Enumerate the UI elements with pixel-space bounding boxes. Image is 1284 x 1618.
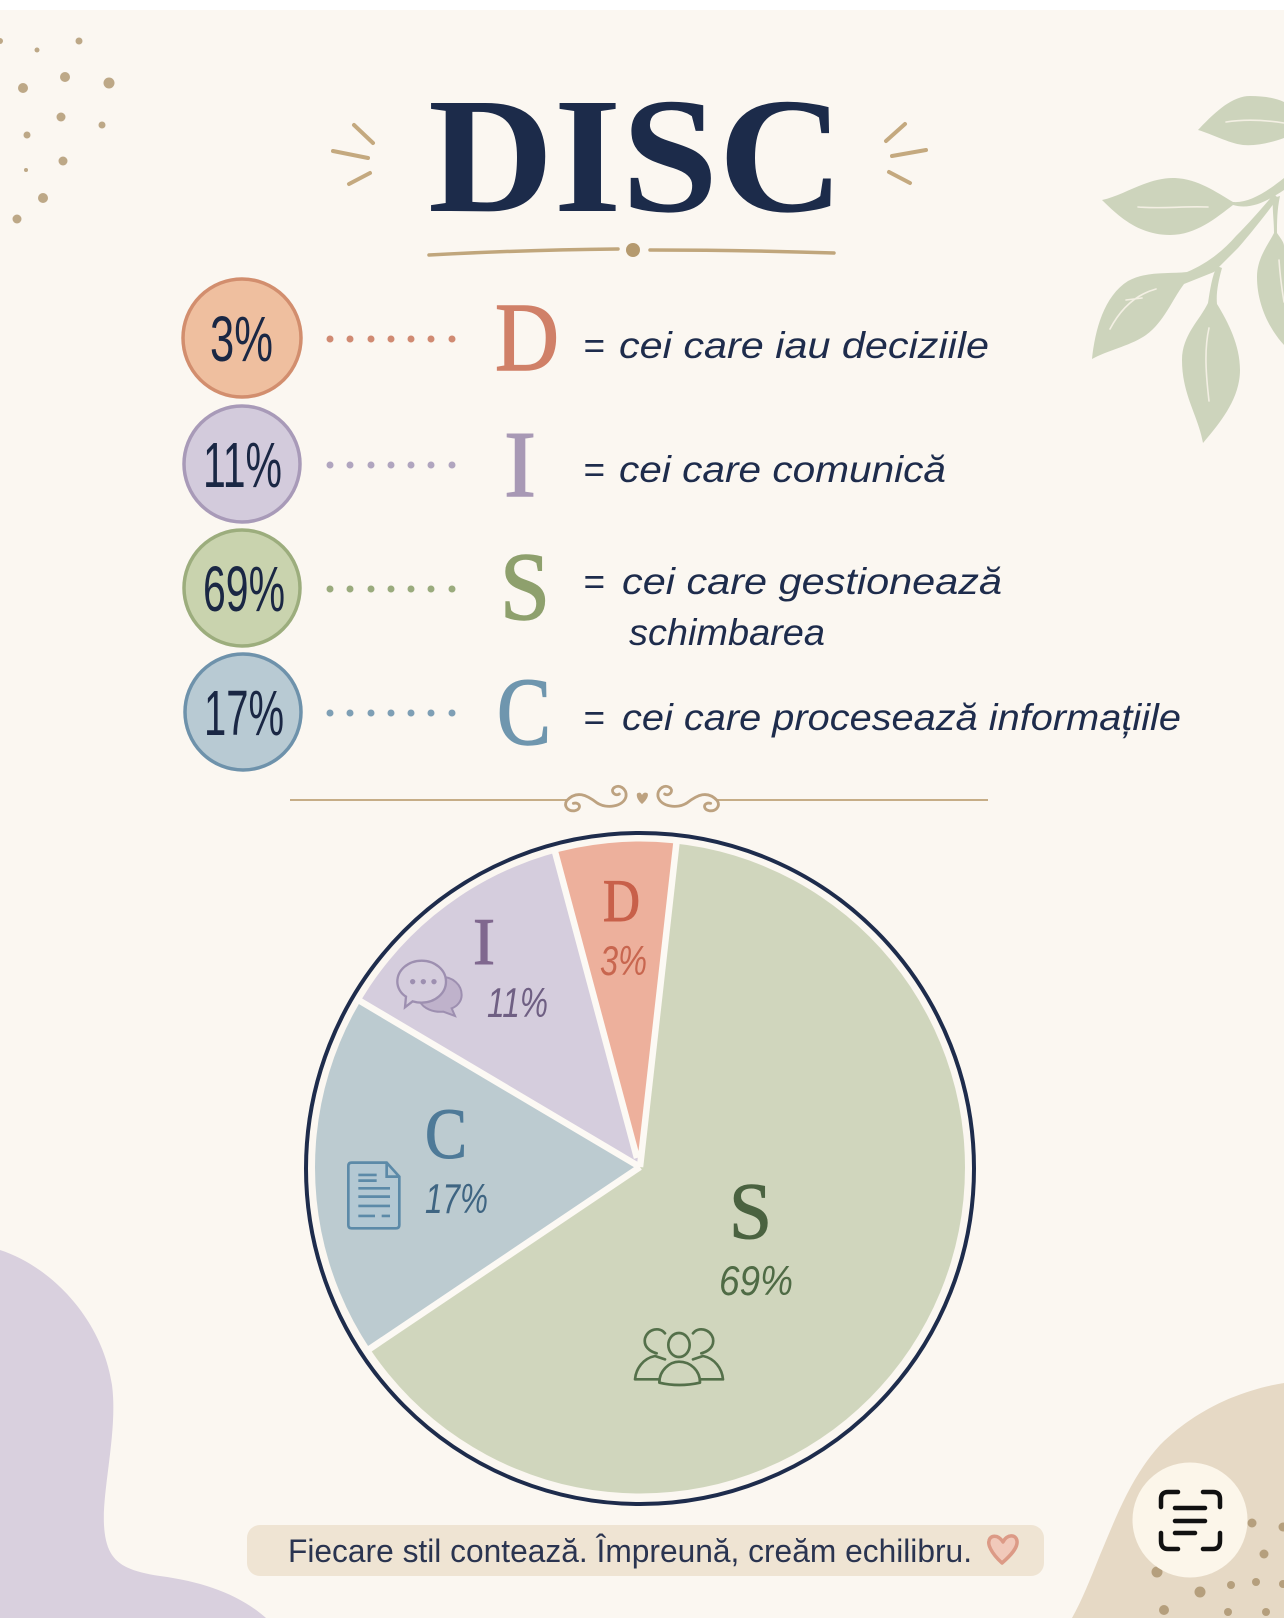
slice: S 69%	[372, 844, 965, 1494]
value: 69%: 69%	[719, 1257, 793, 1304]
decoration: tan blob	[1072, 1383, 1284, 1618]
letter S: S	[500, 533, 550, 640]
badge: 69%: 69%	[203, 553, 285, 625]
ornamental divider	[290, 786, 988, 811]
pie chart	[304, 831, 976, 1506]
label: I: I	[473, 905, 495, 979]
dotted connector	[326, 336, 456, 342]
badge: 11%	[184, 406, 300, 522]
dotted connector	[326, 586, 456, 592]
decoration: top-left dots	[0, 38, 114, 224]
dotted connector	[326, 462, 456, 468]
equals sign: =	[583, 449, 605, 490]
icon: people	[635, 1329, 723, 1385]
decoration: leaf branch	[1092, 96, 1284, 443]
slice separators	[355, 838, 677, 1350]
description text: cei care procesează informațiile	[622, 697, 1181, 738]
letter I: I	[504, 413, 536, 517]
slice: I 11%	[362, 854, 638, 1162]
label: S: S	[729, 1168, 772, 1256]
label: D: D	[603, 868, 640, 934]
dotted connector	[326, 710, 456, 716]
decoration: bottom-right dots	[1152, 1518, 1284, 1616]
description text line 2: schimbarea	[629, 612, 825, 653]
description text line 1: cei care gestionează	[622, 561, 1002, 602]
label: C: C	[425, 1094, 467, 1174]
icon: heart	[989, 1536, 1017, 1563]
footer text: Fiecare stil contează. Împreună, creăm echilibru.	[288, 1533, 972, 1569]
icon: document	[348, 1163, 399, 1228]
value: 3%: 3%	[600, 937, 647, 984]
value: 17%: 17%	[425, 1175, 488, 1222]
equals sign: =	[583, 325, 605, 366]
badge: 11%: 11%	[203, 429, 282, 501]
badge: 17%: 17%	[204, 677, 284, 749]
icon: chat bubbles	[397, 961, 462, 1016]
button: scan text	[1132, 1462, 1248, 1578]
title: DISC: DISC	[428, 64, 844, 247]
badge: 3%	[183, 279, 301, 397]
slice: D 3%	[558, 842, 674, 1158]
description text: cei care iau deciziile	[619, 325, 989, 366]
badge: 69%	[184, 530, 300, 646]
row: C	[185, 654, 1181, 770]
pie outline	[306, 833, 974, 1504]
footer banner	[247, 1525, 1044, 1576]
row: D	[183, 279, 989, 397]
decoration: lavender blob	[0, 1250, 266, 1618]
letter C: C	[497, 658, 551, 765]
equals sign: =	[583, 561, 605, 602]
badge: 3%: 3%	[210, 303, 273, 375]
icon: left sunburst	[333, 125, 373, 184]
row: S	[184, 530, 1002, 653]
letter D: D	[495, 284, 559, 391]
equals sign: =	[583, 697, 605, 738]
slice: C 17%	[315, 1004, 634, 1346]
value: 11%: 11%	[487, 979, 548, 1026]
badge: 17%	[185, 654, 301, 770]
title underline	[429, 243, 834, 257]
description text: cei care comunică	[619, 449, 946, 490]
icon: right sunburst	[886, 124, 926, 183]
row: I	[184, 406, 946, 522]
